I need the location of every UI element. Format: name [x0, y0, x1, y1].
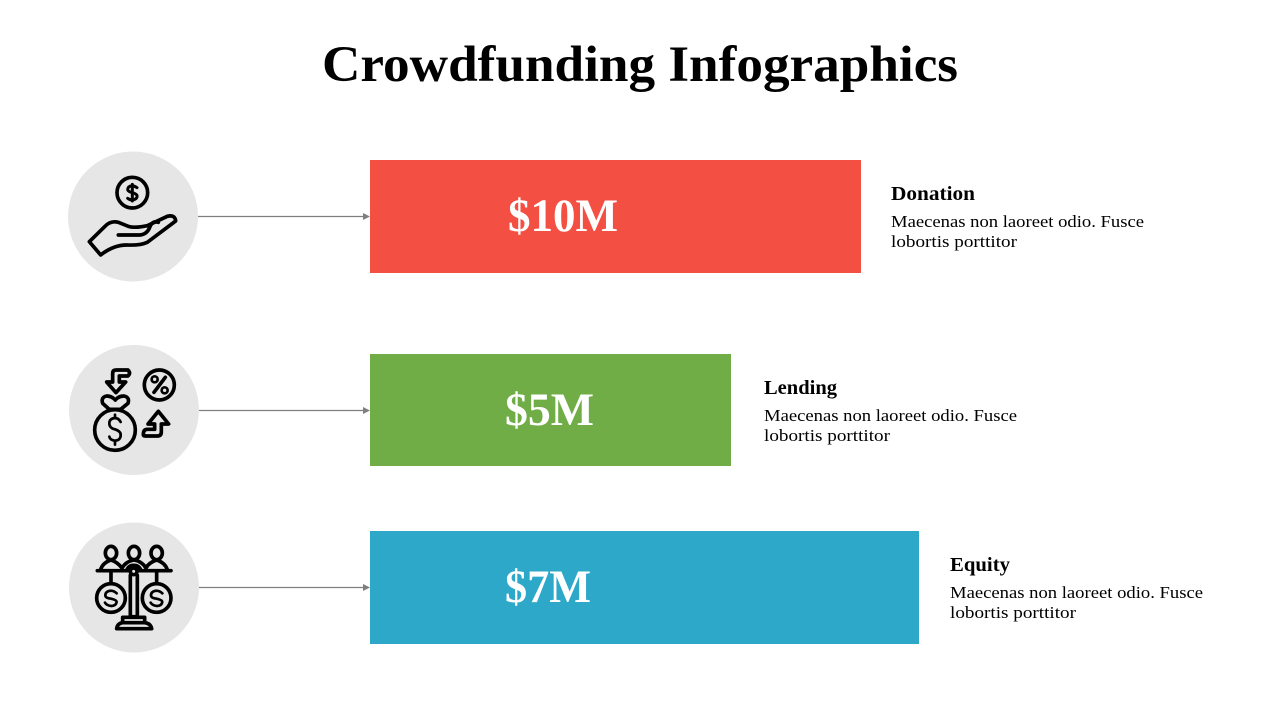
text block: equity — [950, 554, 1203, 622]
row: lending — [69, 345, 1017, 475]
text block: lending: Maecenas non laoreet odio. Fusce — [764, 406, 1017, 425]
value: equity: $7M — [505, 561, 591, 613]
row: donation — [68, 152, 1144, 282]
text block: lending — [764, 377, 1017, 445]
text block: lending: Lending — [764, 377, 837, 399]
icon circle: hand with coin — [68, 152, 198, 282]
arrow: equity — [199, 584, 370, 591]
icon circle: money bag with arrows — [69, 345, 199, 475]
value: donation: $10M — [508, 190, 618, 242]
bar: donation — [370, 160, 861, 273]
row: equity — [69, 522, 1203, 652]
text block: lending: lobortis porttitor — [764, 426, 891, 445]
bar: lending — [370, 354, 731, 466]
text block: donation: lobortis porttitor — [891, 232, 1018, 251]
text block: donation: Maecenas non laoreet odio. Fusce — [891, 212, 1144, 231]
text block: equity: Equity — [950, 554, 1010, 576]
arrow: donation — [198, 213, 370, 220]
text block: donation: Donation — [891, 183, 975, 205]
text block: equity: Maecenas non laoreet odio. Fusce — [950, 583, 1203, 602]
value: lending: $5M — [505, 384, 594, 436]
arrow: lending — [199, 407, 370, 414]
text block: equity: lobortis porttitor — [950, 603, 1077, 622]
title: Crowdfunding Infographics — [322, 37, 958, 93]
bar: equity — [370, 531, 919, 644]
icon circle: people on scale with coins — [69, 522, 199, 652]
text block: donation — [891, 183, 1144, 251]
